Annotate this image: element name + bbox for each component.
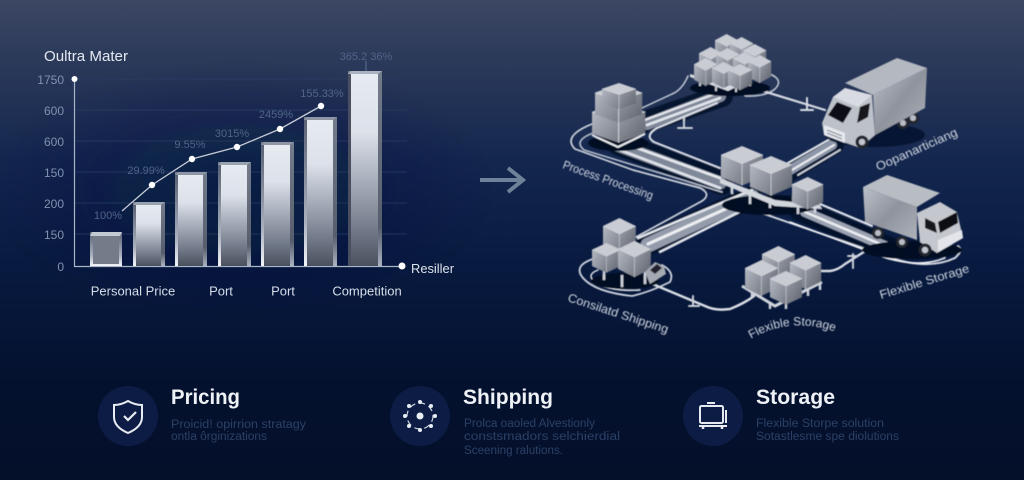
top pallet to truck line (753, 88, 825, 110)
percentage labels: 3015% (215, 128, 249, 140)
heading: storage: Storage (756, 386, 835, 409)
text: pricing description (171, 419, 306, 443)
text: shipping description: Sceening ralutions. (464, 445, 563, 457)
percentage labels: 29.99% (127, 165, 165, 177)
label: process: Process Processing (561, 158, 655, 203)
category labels (91, 284, 402, 298)
panel: pricing (98, 386, 306, 446)
chart title: Oultra Mater (44, 49, 128, 65)
text: shipping description: Prolca oaoled Alvestionly (464, 418, 595, 430)
percentage labels: 155.33% (300, 88, 344, 100)
icon: delivery truck one (822, 58, 927, 148)
category labels: Personal Price (91, 284, 175, 298)
icon: process stack (588, 83, 648, 151)
y axis labels: 200 (44, 197, 64, 211)
y axis labels: 1750 (37, 73, 64, 87)
text: storage description: Sotastlesme spe diolutions (756, 431, 899, 443)
text: pricing description: Proicid! opirrion stratagy (171, 419, 306, 431)
inner square line (650, 103, 720, 168)
text: shipping description (464, 418, 620, 457)
text: pricing description: ontla ôrginizations (171, 431, 267, 443)
label: flexible storage right: Flexible Storage (878, 261, 971, 302)
trend line (122, 61, 366, 211)
category labels: Port (271, 284, 295, 298)
outer loop around process stack (571, 124, 707, 237)
text: storage description (756, 418, 899, 443)
percentage labels (94, 51, 393, 222)
label: operations: Oopanarticiang (874, 125, 960, 174)
logistics network (561, 34, 971, 339)
panel: shipping (390, 386, 620, 457)
icon: central pallet (720, 146, 823, 215)
category labels: Port (209, 284, 233, 298)
arrow (480, 168, 523, 192)
band centre to truck two (820, 204, 872, 226)
bars (90, 71, 382, 266)
dark track shadows (618, 96, 890, 248)
network labels (561, 125, 971, 339)
icon: delivery truck two (862, 175, 963, 259)
y axis labels: 150 (44, 166, 64, 180)
band truck one to centre (790, 145, 832, 170)
icon: storage cart (683, 386, 743, 446)
axes (72, 76, 406, 270)
percentage labels: 9.55% (174, 139, 206, 151)
grid lines (75, 79, 407, 234)
band process to centre (612, 143, 720, 183)
heading: shipping: Shipping (463, 386, 553, 409)
y axis labels: 600 (44, 135, 64, 149)
band centre to shipping (648, 197, 752, 245)
percentage labels: 2459% (259, 109, 293, 121)
category labels: Competition (332, 284, 402, 298)
label: consolidated shipping: Consilatd Shipping (566, 291, 670, 336)
icon: flexible storage group (742, 246, 822, 309)
percentage labels: 100% (94, 210, 122, 222)
percentage labels: 365.2 36% (340, 51, 393, 63)
y axis labels: 0 (57, 260, 64, 274)
x axis label: Resiller (411, 261, 455, 276)
icon: shield (98, 386, 158, 446)
connector shipping to flexible storage (650, 283, 754, 310)
icon: top pallet (690, 34, 771, 96)
y axis labels: 150 (44, 228, 64, 242)
text: shipping description: constsmadors selchierdial (464, 431, 620, 443)
bar chart (0, 49, 500, 320)
loop around top pallet (745, 74, 779, 96)
conveyor tracks (571, 74, 960, 310)
icon: network hub (390, 386, 450, 446)
loop around shipping (580, 258, 671, 296)
icon: shipping group (591, 218, 666, 289)
band top pallet to process stack (647, 96, 720, 124)
y axis labels: 600 (44, 104, 64, 118)
heading: pricing: Pricing (171, 386, 240, 409)
panel: storage (683, 386, 899, 446)
label: flexible storage lower: Flexible Storage (747, 316, 836, 339)
text: storage description: Flexible Storpe solution (756, 418, 884, 430)
connector flexible storage to track (820, 248, 870, 271)
y axis labels (37, 73, 64, 274)
